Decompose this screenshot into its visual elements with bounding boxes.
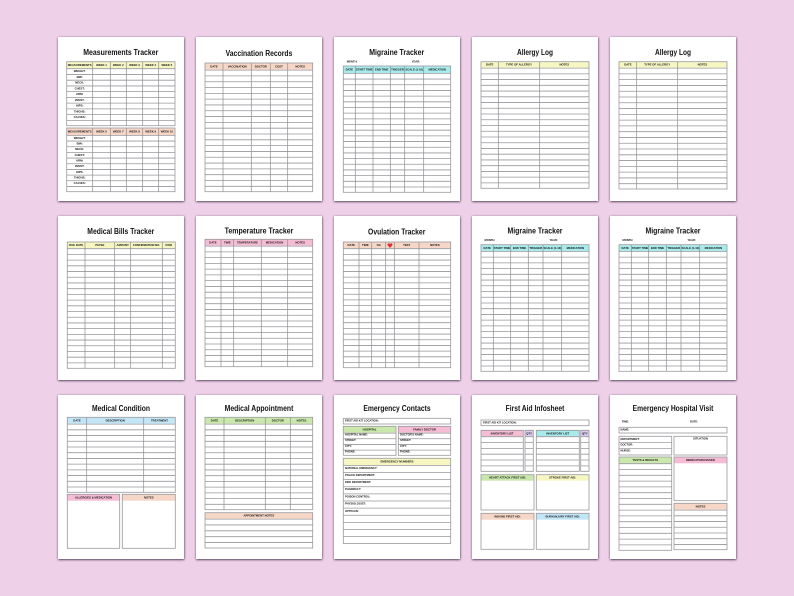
table: migraine log: END TIME xyxy=(375,68,389,72)
panel: migraine tracker page 2 xyxy=(472,216,598,380)
table: temperatures: MEDICATION xyxy=(266,240,283,244)
title: medical condition: Medical Condition xyxy=(92,404,150,413)
table: ovulation: NOTES xyxy=(430,243,440,247)
title: emergency hospital visit: Emergency Hospital Visit xyxy=(633,404,714,413)
table: migraine log: DATE xyxy=(346,68,353,72)
title: emergency contacts: Emergency Contacts xyxy=(363,404,431,413)
table: tests and results xyxy=(619,457,672,550)
table: weeks 1 to 5: MEASUREMENTS xyxy=(68,63,92,67)
table: weeks 1 to 5: BMI: xyxy=(77,75,83,79)
box: notes: NOTES xyxy=(144,496,154,500)
table: temperatures: DATE xyxy=(209,240,217,244)
table: ovulation xyxy=(343,242,451,368)
table: ovulation: DATE xyxy=(347,243,355,247)
table: temperatures: TIME xyxy=(224,240,231,244)
box: stroke first aid xyxy=(536,475,589,510)
table: emergency numbers: OPTICIAN: xyxy=(345,509,359,513)
table: weeks 1 to 5: WEIGHT: xyxy=(74,69,86,73)
table: weeks 6 to 10 xyxy=(67,128,175,192)
table: migraine log: SCALE (1-10) xyxy=(544,246,561,250)
table: inventory list pink xyxy=(481,430,533,471)
table: weeks 1 to 5: NECK: xyxy=(75,81,84,85)
table: migraine log: MEDICATION xyxy=(567,246,584,250)
table: migraine log xyxy=(481,245,589,371)
table: allergies: NOTES xyxy=(698,63,707,67)
table: weeks 6 to 10: BMI: xyxy=(77,142,83,146)
table: migraine log: SCALE (1-10) xyxy=(405,68,423,72)
table: weeks 1 to 5: CHEST: xyxy=(75,86,85,90)
table: appointments: NOTES xyxy=(297,418,306,422)
table: vaccinations: DOCTOR xyxy=(255,64,267,68)
table: weeks 6 to 10: ARM: xyxy=(76,158,83,162)
table: bills: PAYEE xyxy=(95,243,105,247)
title: migraine tracker: Migraine Tracker xyxy=(369,48,424,57)
table: migraine log: SCALE (1-10) xyxy=(682,246,699,250)
table: weeks 6 to 10: WEEK 6 xyxy=(96,130,107,134)
table: temperatures xyxy=(205,239,313,367)
table: weeks 1 to 5: WEEK 5 xyxy=(161,63,173,67)
panel: emergency contacts page xyxy=(334,395,460,559)
table: conditions: TREATMENT xyxy=(151,418,168,422)
table: conditions: DATE xyxy=(73,418,81,422)
table: inventory list pink: INVENTORY LIST xyxy=(491,431,514,435)
table: migraine log: END TIME xyxy=(651,246,664,250)
table: weeks 1 to 5: HIPS: xyxy=(76,104,83,108)
table: family doctor: DOCTOR'S NAME: xyxy=(400,432,424,436)
field: name xyxy=(619,427,727,433)
box: notes xyxy=(122,494,175,548)
table: emergency numbers: POLICE DEPARTMENT: xyxy=(345,473,375,477)
table: weeks 1 to 5: THIGHS: xyxy=(74,109,86,113)
table: tests and results: TESTS & RESULTS xyxy=(633,458,658,462)
table: weeks 6 to 10: WEIGHT: xyxy=(74,136,86,140)
table: appointments: DESCRIPTION xyxy=(235,418,254,422)
table: allergies xyxy=(619,62,727,189)
table: weeks 1 to 5: WAIST: xyxy=(75,98,85,102)
table: vaccinations: NOTES xyxy=(295,64,305,68)
panel: vaccination records page xyxy=(196,37,322,201)
table: migraine log: TRIGGER xyxy=(391,68,404,72)
table: inventory list teal: QTY xyxy=(582,431,588,435)
box: situation xyxy=(674,436,727,455)
table: appointments xyxy=(205,417,313,510)
panel: ovulation tracker page xyxy=(334,216,460,380)
table: migraine log: TRIGGER xyxy=(529,246,542,250)
table: family doctor: PHONE: xyxy=(400,450,411,454)
table: weeks 6 to 10: WEEK 9 xyxy=(145,130,157,134)
title: medical bills tracker: Medical Bills Tracker xyxy=(87,227,154,236)
table: migraine log: START TIME xyxy=(632,246,648,250)
table: migraine log: TRIGGER xyxy=(667,246,680,250)
table: weeks 1 to 5 xyxy=(67,62,175,126)
title: migraine tracker: Migraine Tracker xyxy=(646,226,700,236)
box: heart attack first aid: HEART ATTACK FIRST AID: xyxy=(489,476,526,480)
table: hospital: CITY: xyxy=(345,444,352,448)
table: weeks 1 to 5: ARM: xyxy=(76,92,83,96)
table: ovulation: OA xyxy=(377,243,381,247)
table: family doctor: FAMILY DOCTOR xyxy=(413,428,436,432)
title: migraine tracker: Migraine Tracker xyxy=(508,226,562,236)
table: vaccinations: DATE xyxy=(210,64,218,68)
table: migraine log: START TIME xyxy=(356,68,373,72)
table: hospital xyxy=(343,426,396,455)
field: first aid kit location: FIRST AID KIT LOCATION: xyxy=(483,420,517,424)
table: allergies: DATE xyxy=(624,63,632,67)
table: bills xyxy=(67,242,175,368)
month and year labels xyxy=(622,238,696,242)
table: weeks 6 to 10: WEEK 7 xyxy=(113,130,124,134)
field: first aid kit location xyxy=(481,420,589,426)
table: hospital: HOSPITAL xyxy=(363,428,377,432)
box: wound first aid xyxy=(481,513,534,549)
table: bills: PAID xyxy=(166,243,172,247)
table: weeks 6 to 10: HIPS: xyxy=(76,170,83,174)
table: allergies: TYPE OF ALLERGY xyxy=(644,63,670,67)
month and year labels: YEAR: xyxy=(688,238,696,242)
box: heart attack first aid xyxy=(481,475,534,510)
table: emergency numbers xyxy=(343,458,451,544)
panel: temperature tracker page xyxy=(196,216,322,380)
table: conditions xyxy=(67,417,175,492)
table: vaccinations xyxy=(205,63,313,192)
table: allergies: TYPE OF ALLERGY xyxy=(506,63,532,67)
panel: allergy log page 1 xyxy=(472,37,598,201)
box: stroke first aid: STROKE FIRST AID: xyxy=(549,476,576,480)
table: department details: DOCTOR: xyxy=(620,443,633,447)
table: notes xyxy=(674,503,727,550)
title: measurements tracker: Measurements Tracker xyxy=(83,48,158,57)
panel: first aid infosheet page xyxy=(472,395,598,559)
box: wound first aid: WOUND FIRST AID: xyxy=(494,514,521,518)
table: allergies: NOTES xyxy=(559,63,569,67)
table: bills: DUE DATE xyxy=(69,243,83,247)
time and date labels: DATE: xyxy=(690,420,698,424)
box: appointment notes xyxy=(205,513,313,548)
table: migraine log: START TIME xyxy=(494,246,510,250)
table: migraine log xyxy=(343,66,451,192)
box: burn injury first aid xyxy=(536,513,589,549)
box: appointment notes: APPOINTMENT NOTES xyxy=(243,514,274,518)
table: migraine log: MEDICATION xyxy=(705,246,722,250)
table: migraine log: DATE xyxy=(621,246,629,250)
box: allergies and medication: ALLERGIES & MEDICATION xyxy=(75,496,112,500)
table: appointments: DATE xyxy=(211,418,218,422)
title: first aid infosheet: First Aid Infosheet xyxy=(506,404,565,413)
month and year labels: MONTH: xyxy=(347,60,358,64)
table: emergency numbers: POISON CONTROL: xyxy=(345,494,370,498)
icon: heart xyxy=(387,243,393,248)
table: family doctor: STREET: xyxy=(400,438,411,442)
table: weeks 1 to 5: WEEK 1 xyxy=(96,63,107,67)
panel: allergy log page 2 xyxy=(610,37,736,201)
table: weeks 6 to 10: WEEK 10 xyxy=(161,130,173,134)
month and year labels: YEAR: xyxy=(412,60,420,64)
box: situation: SITUATION xyxy=(693,436,708,440)
box: burn injury first aid: BURN INJURY FIRST AID: xyxy=(546,514,580,518)
title: vaccination records: Vaccination Records xyxy=(226,49,293,58)
table: hospital: HOSPITAL NAME: xyxy=(345,432,368,436)
month and year labels xyxy=(347,60,420,64)
table: bills: AMOUNT xyxy=(117,243,129,247)
table: migraine log xyxy=(619,245,727,371)
table: inventory list teal xyxy=(536,430,589,471)
title: allergy log: Allergy Log xyxy=(517,48,553,57)
panel: emergency hospital visit page xyxy=(610,395,736,559)
table: weeks 1 to 5: CALVES: xyxy=(74,115,86,119)
table: ovulation: TIME xyxy=(362,243,369,247)
table: conditions: DESCRIPTION xyxy=(106,418,125,422)
title: temperature tracker: Temperature Tracker xyxy=(225,226,293,236)
table: vaccinations: VACCINATION xyxy=(228,64,247,68)
table: vaccinations: COST xyxy=(275,64,283,68)
month and year labels xyxy=(484,238,558,242)
table: temperatures: NOTES xyxy=(295,240,305,244)
table: weeks 6 to 10: MEASUREMENTS xyxy=(68,130,92,134)
table: emergency numbers: NATIONAL EMERGENCY: xyxy=(345,466,378,470)
table: temperatures: TEMPERATURE xyxy=(237,240,258,244)
table: family doctor xyxy=(398,426,451,455)
table: weeks 6 to 10: THIGHS: xyxy=(74,176,86,180)
title: medical appointment: Medical Appointment xyxy=(225,404,294,413)
panel: medical bills tracker page xyxy=(58,216,184,380)
month and year labels: MONTH: xyxy=(484,238,495,242)
table: weeks 1 to 5: WEEK 3 xyxy=(129,63,140,67)
table: weeks 6 to 10: WAIST: xyxy=(75,164,85,168)
table: family doctor: CITY: xyxy=(400,444,407,448)
box: medication issued: MEDICATION ISSUED xyxy=(686,458,715,462)
panel: measurements tracker page xyxy=(58,37,184,201)
table: emergency numbers: PHARMACY: xyxy=(345,487,361,491)
table: emergency numbers: PHYSIOLOGIST: xyxy=(345,502,366,506)
table: migraine log: MEDICATION xyxy=(428,68,446,72)
table: allergies xyxy=(481,62,589,188)
table: emergency numbers: EMERGENCY NUMBERS xyxy=(381,460,414,464)
field: first aid kit location: FIRST AID KIT LOCATION: xyxy=(345,419,379,423)
table: weeks 6 to 10: CHEST: xyxy=(75,153,85,157)
month and year labels: YEAR: xyxy=(550,238,558,242)
table: weeks 1 to 5: WEEK 2 xyxy=(113,63,124,67)
table: department details: DEPARTMENT: xyxy=(620,437,640,441)
table: emergency numbers: FIRE DEPARTMENT: xyxy=(345,480,371,484)
time and date labels: TIME: xyxy=(622,420,629,424)
table: inventory list teal: INVENTORY LIST xyxy=(546,431,570,435)
title: ovulation tracker: Ovulation Tracker xyxy=(368,228,425,236)
field: first aid kit location xyxy=(343,418,451,424)
table: weeks 6 to 10: WEEK 8 xyxy=(129,130,140,134)
panel: medical appointment page xyxy=(196,395,322,559)
field: name: NAME: xyxy=(620,428,629,432)
table: migraine log: END TIME xyxy=(513,246,526,250)
table: weeks 1 to 5: WEEK 4 xyxy=(145,63,157,67)
box: allergies and medication xyxy=(67,494,120,548)
table: hospital: PHONE: xyxy=(345,450,356,454)
time and date labels xyxy=(622,420,698,424)
box: medication issued xyxy=(674,457,727,501)
panel: migraine tracker page 3 xyxy=(610,216,736,380)
month and year labels: MONTH: xyxy=(622,238,633,242)
panel: medical condition page xyxy=(58,395,184,559)
table: migraine log: DATE xyxy=(483,246,491,250)
table: bills: CONFIRMATION NO. xyxy=(133,243,160,247)
panel: migraine tracker page 1 xyxy=(334,37,460,201)
table: notes: NOTES xyxy=(696,504,705,508)
table: inventory list pink: QTY xyxy=(526,431,532,435)
title: allergy log: Allergy Log xyxy=(655,48,691,57)
table: hospital: STREET: xyxy=(345,438,356,442)
table: department details: NURSE: xyxy=(620,449,631,453)
table: department details xyxy=(619,436,672,455)
table: weeks 6 to 10: CALVES: xyxy=(74,181,86,185)
table: ovulation: TEST xyxy=(403,243,411,247)
table: allergies: DATE xyxy=(486,63,494,67)
table: appointments: DOCTOR xyxy=(272,418,284,422)
table: weeks 6 to 10: NECK: xyxy=(75,147,84,151)
